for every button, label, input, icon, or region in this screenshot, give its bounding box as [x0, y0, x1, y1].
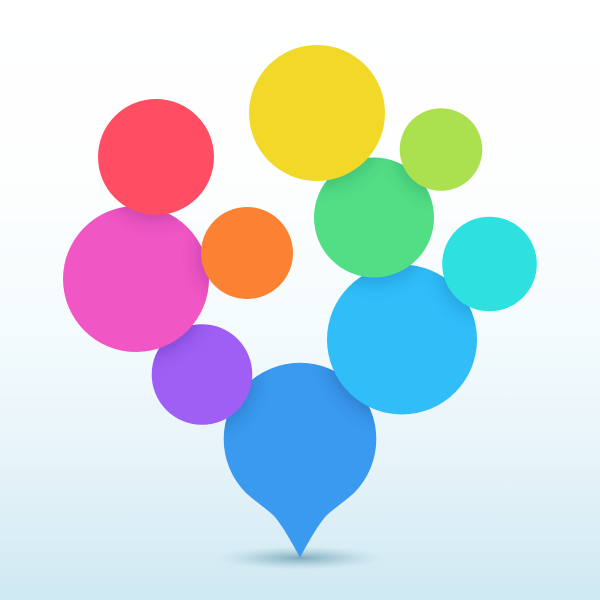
- circle: orange: [201, 207, 293, 299]
- circle: sky blue: [327, 265, 477, 414]
- pin: large blue marker: [224, 362, 376, 558]
- pin ground shadow: [216, 546, 384, 570]
- circle: teal: [442, 217, 537, 311]
- circle: magenta: [63, 206, 209, 352]
- circle: red: [98, 99, 214, 215]
- circle: purple: [152, 324, 252, 425]
- circle: green: [314, 158, 434, 278]
- circle: lime: [400, 108, 482, 191]
- circle: yellow: [249, 45, 385, 181]
